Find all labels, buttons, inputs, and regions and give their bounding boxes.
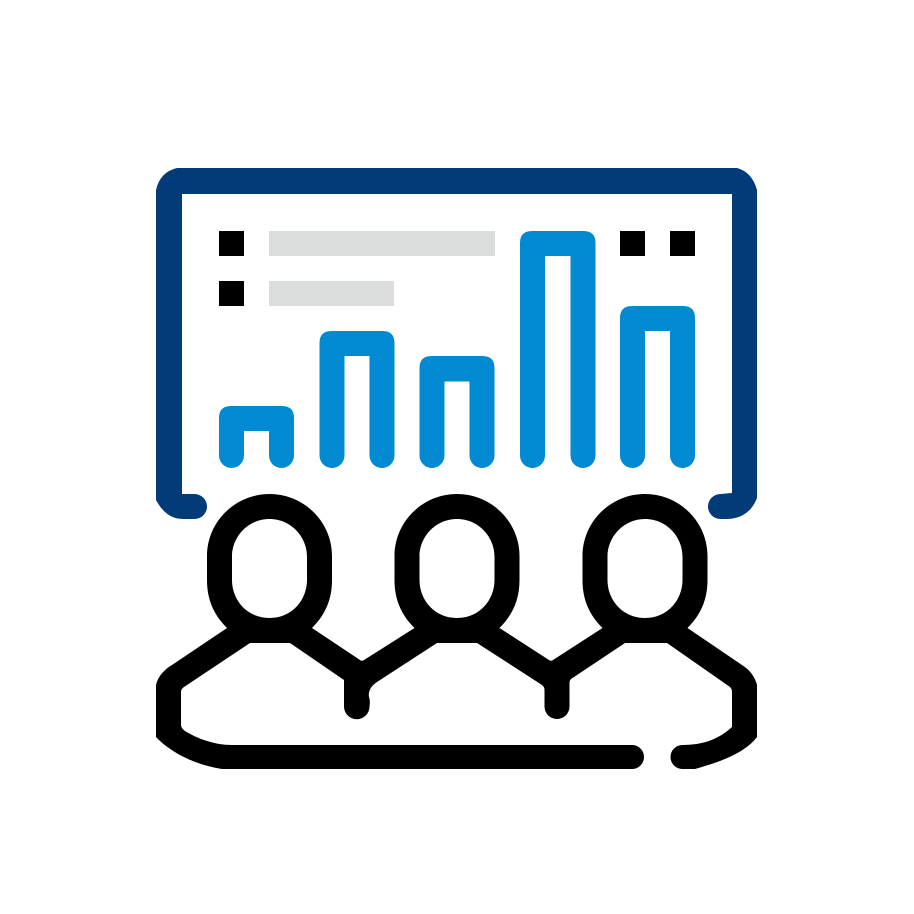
- shoulders and body outline: [156, 628, 757, 769]
- presentation board frame: [156, 168, 757, 519]
- person right head: [582, 494, 708, 643]
- audience of three people: [156, 494, 757, 769]
- person middle head: [394, 494, 520, 643]
- bar chart: [219, 231, 695, 468]
- person left head: [207, 494, 332, 643]
- text placeholder bars: [269, 231, 495, 306]
- list and legend markers: [219, 231, 695, 306]
